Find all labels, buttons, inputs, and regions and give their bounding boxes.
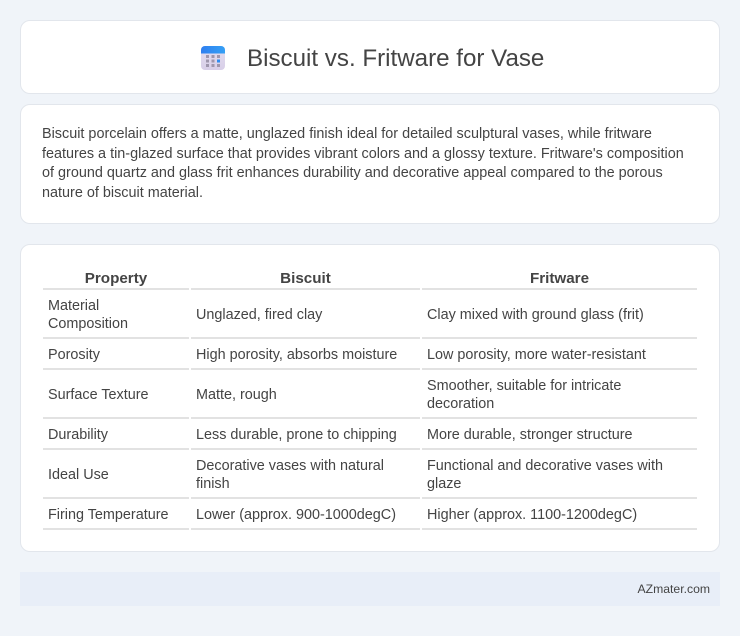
row: durability: Less durable, prone to chipping bbox=[196, 427, 397, 443]
row: surface texture bbox=[48, 378, 621, 412]
row: firing temperature: Firing Temperature bbox=[48, 507, 169, 523]
row: surface texture: Smoother, suitable for intricate bbox=[427, 378, 621, 394]
row: surface texture: Surface Texture bbox=[48, 387, 149, 403]
icon: calendar bbox=[201, 46, 225, 70]
summary text bbox=[42, 126, 684, 201]
row: surface texture: Matte, rough bbox=[196, 387, 277, 403]
row: surface texture: decoration bbox=[427, 396, 494, 412]
summary text: of ground quartz and glass frit enhances durability and decorative appeal compared to the porous bbox=[42, 165, 663, 181]
row: ideal use: Ideal Use bbox=[48, 467, 109, 483]
table header: Property bbox=[85, 270, 147, 287]
panel: summary bbox=[20, 104, 720, 224]
row: durability: More durable, stronger structure bbox=[427, 427, 633, 443]
row: ideal use: glaze bbox=[427, 476, 461, 492]
row: porosity: High porosity, absorbs moisture bbox=[196, 347, 397, 363]
row: firing temperature: Higher (approx. 1100-1200degC) bbox=[427, 507, 637, 523]
row: ideal use: finish bbox=[196, 476, 230, 492]
row: ideal use: Functional and decorative vases with bbox=[427, 458, 663, 474]
row: firing temperature bbox=[48, 507, 637, 523]
summary text: nature of biscuit material. bbox=[42, 185, 203, 201]
summary text: Biscuit porcelain offers a matte, unglazed finish ideal for detailed sculptural vases, while fritware bbox=[42, 126, 652, 142]
footer bar bbox=[20, 572, 720, 606]
row: material composition bbox=[48, 298, 644, 332]
row: porosity bbox=[48, 347, 646, 363]
title: Biscuit vs. Fritware for Vase bbox=[247, 45, 544, 72]
row: durability bbox=[48, 427, 633, 443]
header card bbox=[20, 20, 720, 94]
row: porosity: Porosity bbox=[48, 347, 100, 363]
row: material composition: Material bbox=[48, 298, 99, 314]
summary text: features a tin-glazed surface that provides vibrant colors and a glossy texture. Fritware's composition bbox=[42, 146, 684, 162]
row: firing temperature: Lower (approx. 900-1000degC) bbox=[196, 507, 396, 523]
row: ideal use bbox=[48, 458, 663, 492]
table header: Fritware bbox=[530, 270, 589, 287]
panel: comparison table bbox=[20, 244, 720, 552]
row: material composition: Clay mixed with ground glass (frit) bbox=[427, 307, 644, 323]
table header: Biscuit bbox=[280, 270, 331, 287]
footer credit: AZmater.com bbox=[638, 582, 710, 596]
row: durability: Durability bbox=[48, 427, 108, 443]
table header bbox=[85, 270, 589, 287]
row: porosity: Low porosity, more water-resistant bbox=[427, 347, 646, 363]
row: ideal use: Decorative vases with natural bbox=[196, 458, 384, 474]
row: material composition: Unglazed, fired clay bbox=[196, 307, 322, 323]
row: material composition: Composition bbox=[48, 316, 128, 332]
